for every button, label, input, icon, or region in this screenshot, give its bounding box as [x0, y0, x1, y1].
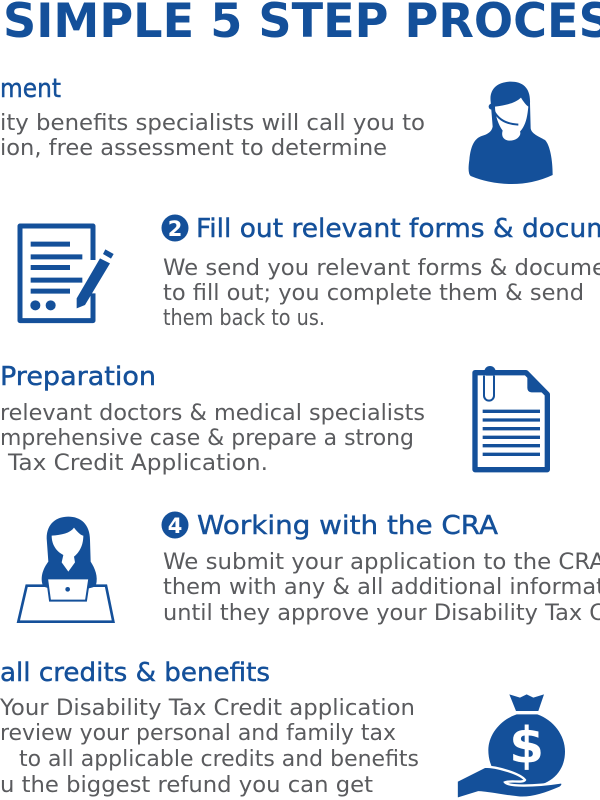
icon: woman with headset — [469, 82, 553, 184]
step 2 description: to fill out; you complete them & send — [163, 280, 584, 306]
step 2 description — [163, 255, 600, 331]
step 3 description: Tax Credit Application. — [7, 450, 268, 476]
step 4 description: until they approve your Disability Tax C — [163, 600, 600, 626]
step 3 description: mprehensive case & prepare a strong — [0, 425, 414, 451]
step 4 number badge: 4 — [168, 514, 182, 538]
step 3: preparation — [0, 362, 547, 476]
icon: hand holding money bag: $ — [509, 716, 544, 774]
icon: woman at laptop — [18, 517, 113, 622]
step 5 description: review your personal and family tax — [0, 720, 396, 746]
step 5 heading: all credits & benefits — [0, 658, 270, 688]
step 3 description: relevant doctors & medical specialists — [0, 400, 425, 426]
step 2 number badge — [162, 214, 188, 242]
step 1 heading: ment — [0, 74, 61, 104]
step 1 description: ion, free assessment to determine — [0, 135, 387, 161]
step 5 description: Your Disability Tax Credit application — [0, 695, 415, 721]
step 2 heading: Fill out relevant forms & docum — [196, 214, 600, 244]
step 2 description: them back to us. — [163, 305, 325, 331]
step 5 description — [0, 695, 419, 798]
step 1: assessment — [0, 74, 553, 184]
step 4 description: them with any & all additional informat — [163, 574, 600, 600]
icon: clipped document — [475, 366, 547, 470]
step 5: all credits and benefits — [0, 658, 565, 799]
step 3 heading: Preparation — [0, 362, 156, 392]
step 1 description: ity benefits specialists will call you to — [0, 110, 425, 136]
step 4 description: We submit your application to the CRA — [163, 549, 600, 575]
step 1 description — [0, 110, 425, 161]
step 4: working with the CRA — [18, 511, 600, 626]
icon: form and pen — [20, 226, 114, 321]
step 2: fill out forms — [20, 214, 600, 331]
step 4 description — [163, 549, 600, 626]
step 5 description: to all applicable credits and benefits — [19, 746, 419, 772]
step 3 description — [0, 400, 425, 476]
step 4 heading: Working with the CRA — [197, 511, 498, 541]
step 4 number badge — [162, 512, 188, 538]
icon: hand holding money bag — [457, 694, 565, 799]
step 2 number badge: 2 — [168, 217, 182, 241]
step 5 description: u the biggest refund you can get — [0, 772, 373, 798]
step 2 description: We send you relevant forms & docume — [163, 255, 600, 281]
